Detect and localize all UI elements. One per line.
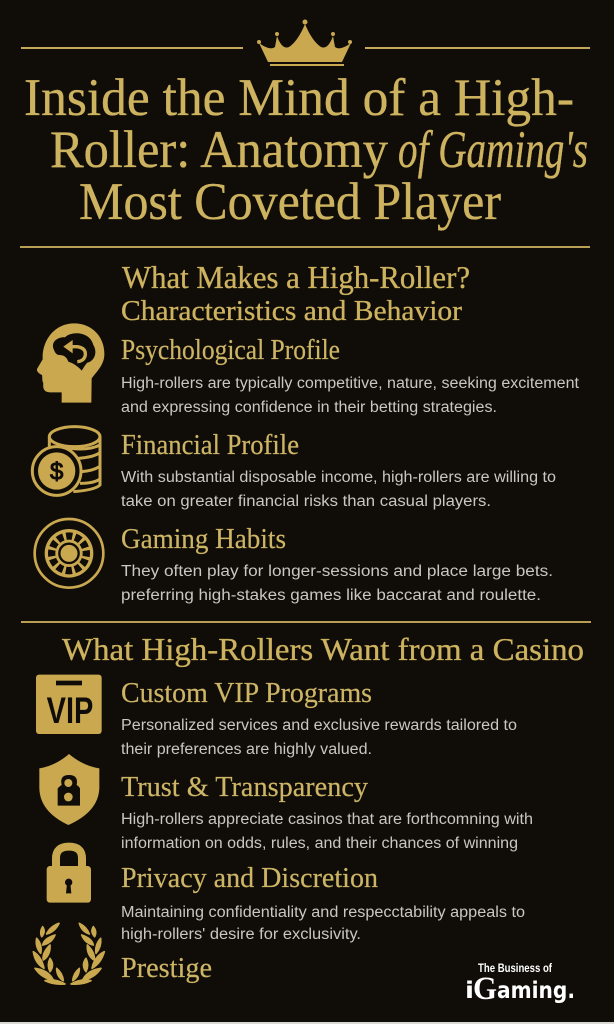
text: gaming habits body [121, 563, 553, 604]
logo: the business of igaming: i [465, 978, 474, 1004]
icon: roulette wheel [35, 519, 103, 588]
icon: VIP badge [36, 675, 102, 734]
text: financial profile body: With substantial disposable income, high-rollers are willing to [121, 469, 556, 486]
icon: coins: $ [50, 458, 63, 485]
text: custom vip body: Personalized services and exclusive rewards tailored to [121, 717, 517, 734]
heading: what makes a high-roller: Characteristics and Behavior [121, 295, 462, 327]
icon: head with brain [37, 323, 104, 403]
icon: VIP badge: VIP [47, 689, 93, 731]
text: privacy body: high-rollers' desire for exclusivity. [121, 926, 361, 943]
heading: gaming habits: Gaming Habits [121, 524, 286, 555]
title: Inside the Mind of a High- [24, 69, 574, 127]
heading: custom vip programs: Custom VIP Programs [121, 678, 372, 709]
text: custom vip body: their preferences are highly valued. [121, 741, 372, 758]
title: Roller: Anatomy [50, 121, 388, 179]
heading: psychological profile: Psychological Profile [121, 335, 340, 366]
icon: padlock [47, 847, 91, 903]
icon: crown [257, 20, 352, 66]
heading: what makes a high-roller [121, 259, 470, 327]
icon: shield with lock [39, 754, 99, 825]
text: psychological profile body: High-rollers are typically competitive, nature, seeking excitement [121, 375, 580, 392]
text: gaming habits body: preferring high-stakes games like baccarat and roulette. [121, 587, 541, 604]
text: financial profile body [121, 469, 556, 510]
icon: coins [32, 427, 100, 495]
logo: the business of igaming: aming. [497, 978, 575, 1004]
text: custom vip body [121, 717, 517, 758]
icon: laurel wreath [33, 923, 104, 984]
heading: prestige: Prestige [121, 953, 212, 984]
title [24, 69, 588, 231]
text: trust body: High-rollers appreciate casinos that are forthcomning with [121, 811, 533, 828]
heading: what makes a high-roller: What Makes a High-Roller? [122, 259, 470, 295]
heading: trust and transparency: Trust & Transparency [121, 772, 368, 803]
text: gaming habits body: They often play for longer-sessions and place large bets. [121, 563, 553, 580]
heading: what high-rollers want: What High-Rollers Want from a Casino [62, 631, 584, 667]
heading: financial profile: Financial Profile [121, 430, 299, 461]
text: trust body [121, 811, 533, 852]
text: privacy body [121, 904, 525, 943]
title: Most Coveted Player [79, 173, 501, 231]
text: trust body: information on odds, rules, and their chances of winning [121, 835, 518, 852]
text: psychological profile body [121, 375, 580, 416]
logo: the business of igaming: G [473, 971, 497, 1007]
text: financial profile body: take on greater financial risks than casual players. [121, 493, 491, 510]
logo: the business of igaming: The Business of [478, 961, 553, 975]
text: psychological profile body: and expressing confidence in their betting strategies. [121, 399, 497, 416]
text: privacy body: Maintaining confidentiality and respecctability appeals to [121, 904, 525, 921]
heading: privacy and discretion: Privacy and Discretion [121, 863, 378, 894]
logo: the business of igaming [465, 961, 575, 1007]
